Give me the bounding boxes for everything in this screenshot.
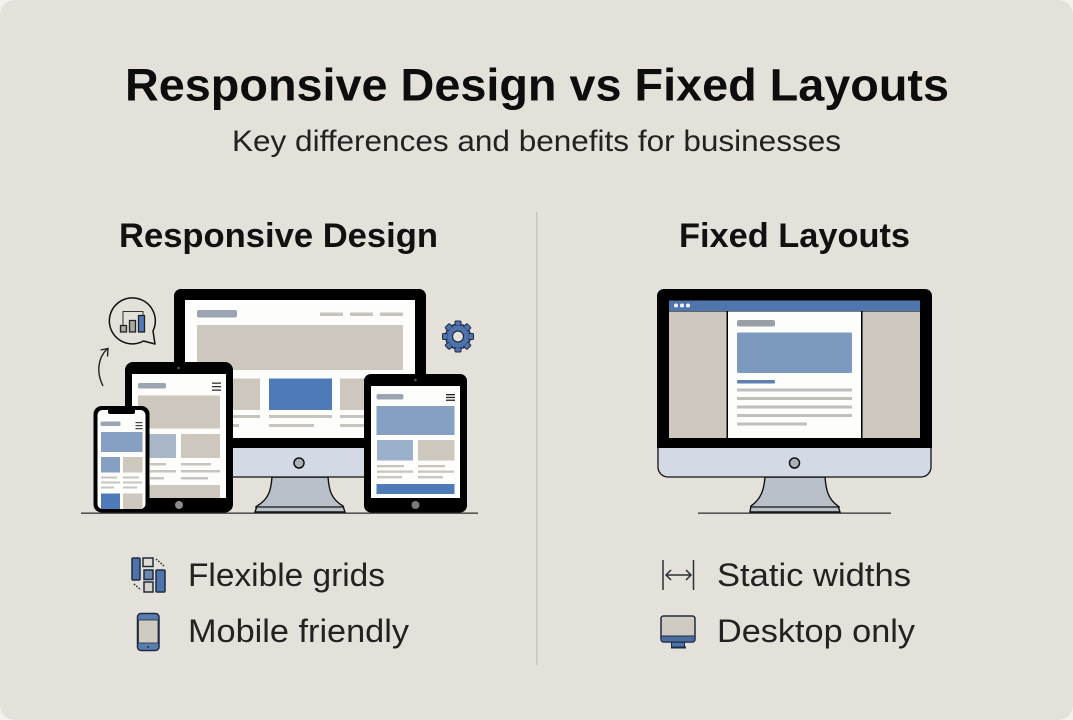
side margins [669, 312, 920, 438]
icon: gear [442, 321, 474, 352]
device: tablet large [125, 362, 233, 512]
monitor bezel [657, 289, 932, 448]
title: Responsive Design vs Fixed Layouts [125, 60, 949, 110]
heading: fixed layouts: Fixed Layouts [679, 217, 910, 255]
arrow: curved upward [99, 348, 108, 386]
panel: fixed layouts [657, 217, 932, 649]
illustration: fixed desktop monitor [657, 289, 932, 514]
subtitle: Key differences and benefits for businesses [232, 125, 841, 158]
icon: analytics speech bubble [109, 298, 155, 344]
fixed content column [728, 312, 861, 438]
feature: flexible grids: Flexible grids [188, 557, 385, 593]
feature: mobile friendly: Mobile friendly [188, 613, 409, 649]
browser bar [669, 300, 920, 311]
feature: desktop only: Desktop only [717, 613, 915, 649]
illustration: responsive devices [81, 289, 478, 514]
ground line [81, 512, 478, 514]
monitor stand [750, 477, 840, 512]
device: phone [94, 406, 150, 512]
heading: responsive design: Responsive Design [119, 217, 438, 255]
feature: static widths: Static widths [717, 557, 911, 593]
device: desktop monitor [174, 289, 426, 512]
device: tablet small [364, 374, 467, 512]
monitor chin [658, 445, 931, 477]
panel: responsive design [81, 217, 478, 650]
ground line [698, 512, 891, 514]
icon: mobile phone [138, 614, 159, 650]
icon: flexible grid [132, 558, 165, 592]
icon: static width arrows [663, 560, 694, 590]
icon: desktop [661, 616, 695, 648]
